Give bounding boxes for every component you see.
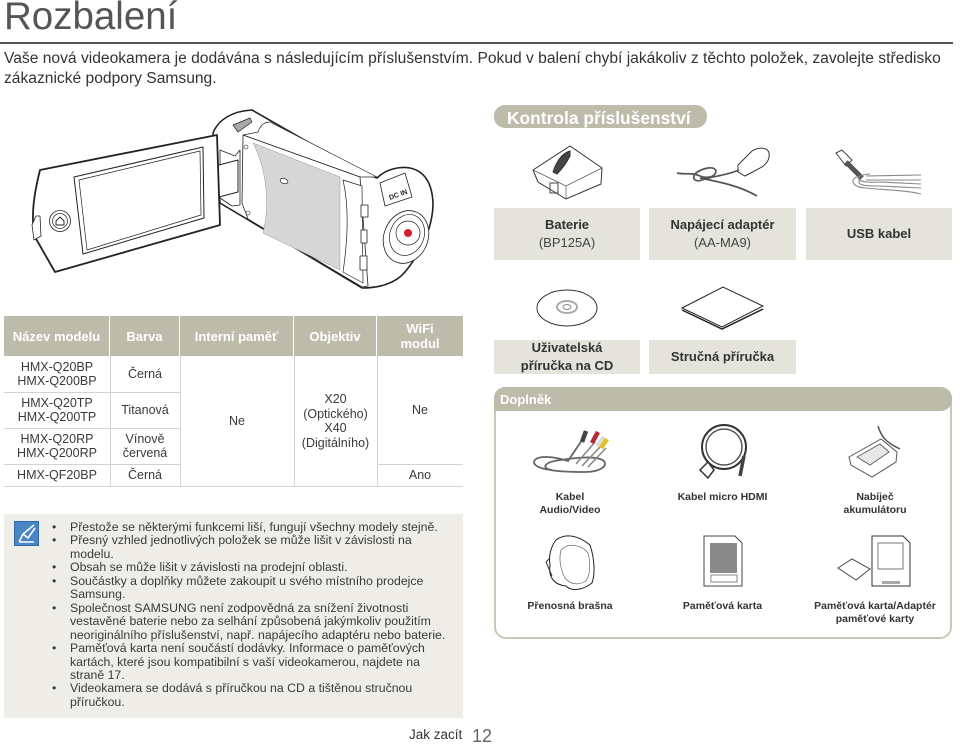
caption: charger: Nabíječ bbox=[856, 490, 894, 502]
cell: Q20BP models: HMX-Q200BP bbox=[17, 374, 97, 388]
notes list: Videokamera se dodává s příručkou na CD a tištěnou stručnou příručkou. bbox=[70, 681, 412, 709]
icon: memory card bbox=[704, 536, 742, 586]
caption: AV cable: Kabel bbox=[556, 490, 584, 502]
table header: model name bbox=[4, 316, 110, 356]
accessory label: USB cable bbox=[806, 208, 952, 260]
cell: Q20TP models: HMX-Q200TP bbox=[18, 410, 96, 424]
cell: Q20BP models bbox=[17, 360, 97, 388]
table header: model name: Název modelu bbox=[13, 328, 100, 344]
notes list: Paměťová karta není součástí dodávky. Informace o paměťových kartách, které jsou kompatibilní s vaší videokamerou, najdete na straně 17. bbox=[70, 641, 425, 682]
caption: AV cable bbox=[539, 490, 601, 516]
panel heading: optional accessories bbox=[494, 387, 952, 411]
accessory label: power adapter: Napájecí adaptér bbox=[670, 217, 775, 232]
table header: colour bbox=[110, 316, 180, 356]
caption: memory card adapter bbox=[814, 600, 936, 625]
caption: charger bbox=[843, 490, 906, 516]
cell: wifi no: Ne bbox=[412, 403, 428, 417]
icon: battery charger bbox=[848, 426, 900, 478]
caption: charger: akumulátoru bbox=[843, 504, 906, 516]
intro text: Vaše nová videokamera je dodávána s následujícím příslušenstvím. Pokud v balení chybí jakákoliv z těchto položek, zavolejte středisko bbox=[4, 50, 941, 67]
cell: titanium: Titanová bbox=[121, 403, 169, 417]
icon: note pencil bbox=[14, 521, 39, 546]
caption: memory card: Paměťová karta bbox=[683, 600, 762, 612]
caption: AV cable: Audio/Video bbox=[539, 504, 601, 516]
notes list: Obsah se může lišit v závislosti na prodejní oblasti. bbox=[70, 560, 348, 574]
cell: black: Černá bbox=[128, 367, 162, 381]
intro text: zákaznické podpory Samsung. bbox=[4, 70, 217, 87]
table header: lens: Objektiv bbox=[309, 328, 361, 344]
cell: Q20RP models: HMX-Q20RP bbox=[21, 432, 93, 446]
table header: lens bbox=[294, 316, 377, 356]
table header: internal memory bbox=[180, 316, 294, 356]
icon: carry case bbox=[545, 535, 594, 590]
icon: micro card with adapter bbox=[837, 536, 910, 586]
accessory label: battery: (BP125A) bbox=[539, 235, 595, 250]
accessory label: power adapter bbox=[649, 208, 796, 260]
cell: black QF: Černá bbox=[128, 468, 162, 482]
cell: wine red: Vínově bbox=[126, 432, 164, 446]
cell: Q20BP models: HMX-Q20BP bbox=[21, 360, 93, 374]
panel: optional accessories bbox=[494, 387, 952, 639]
notes list: Součástky a doplňky můžete zakoupit u svého místního prodejce Samsung. bbox=[70, 574, 423, 601]
cell: wine red: červená bbox=[123, 446, 167, 460]
cell: Q20TP models: HMX-Q20TP bbox=[21, 396, 93, 410]
cell: internal memory no: Ne bbox=[229, 414, 245, 428]
icon: AV cable bbox=[533, 430, 609, 473]
cell: QF20BP model: HMX-QF20BP bbox=[17, 468, 97, 482]
panel: notes bbox=[4, 514, 463, 718]
icon: quick guide booklet bbox=[681, 286, 764, 330]
icon: power adapter bbox=[676, 148, 770, 197]
accessory label: quick guide: Stručná příručka bbox=[671, 349, 774, 364]
title rule bbox=[0, 42, 953, 44]
table header: WiFi: modul bbox=[400, 336, 440, 351]
intro text bbox=[4, 50, 941, 87]
notes list: Přestože se některými funkcemi liší, fungují všechny modely stejně. bbox=[70, 520, 438, 534]
caption: carry case: Přenosná brašna bbox=[527, 600, 613, 612]
icon: micro HDMI cable bbox=[699, 424, 747, 480]
caption: memory card adapter: Paměťová karta/Adaptér bbox=[814, 600, 936, 612]
illustration: camcorder: DC IN bbox=[388, 189, 409, 202]
accessory label: user manual CD bbox=[494, 340, 640, 374]
table: models bbox=[4, 316, 463, 487]
table header: colour: Barva bbox=[126, 328, 163, 344]
cell: zoom values: (Optického) bbox=[303, 406, 368, 420]
cell: Q20TP models bbox=[18, 396, 96, 424]
cell: zoom values: X40 bbox=[324, 421, 347, 435]
notes list: Přesný vzhled jednotlivých položek se může lišit v závislosti na modelu. bbox=[70, 533, 412, 561]
cell: wifi yes: Ano bbox=[409, 468, 431, 482]
caption: memory card adapter: paměťové karty bbox=[836, 613, 914, 625]
accessory label: user manual CD: Uživatelská bbox=[532, 340, 602, 354]
cell: zoom values bbox=[302, 392, 369, 450]
cell: Q20RP models bbox=[17, 432, 97, 460]
notes list: Společnost SAMSUNG není zodpovědná za snížení životnosti vestavěné baterie nebo za selhání způsobená jakýmkoliv použitím neoriginálního příslušenství, např. napájecího adaptéru nebo baterie. bbox=[70, 601, 445, 642]
caption: HDMI cable: Kabel micro HDMI bbox=[678, 490, 767, 502]
notes list bbox=[52, 520, 445, 709]
cell: zoom values: (Digitálního) bbox=[302, 436, 369, 450]
table header: WiFi bbox=[377, 316, 463, 356]
accessory label: USB cable: USB kabel bbox=[847, 226, 911, 241]
icon: CD bbox=[536, 290, 598, 326]
cell: zoom values: X20 bbox=[324, 392, 347, 406]
accessory label: battery: Baterie bbox=[545, 217, 589, 232]
pill heading: accessory check: Kontrola příslušenství bbox=[507, 108, 691, 128]
panel heading: optional accessories: Doplněk bbox=[500, 392, 551, 407]
accessory label: battery bbox=[494, 208, 640, 260]
footer: section name: Jak zacít bbox=[409, 727, 462, 742]
accessory label: quick guide bbox=[649, 340, 796, 374]
table header: internal memory: Interní paměť bbox=[195, 328, 278, 344]
cell: Q20RP models: HMX-Q200RP bbox=[17, 446, 97, 460]
icon: battery bbox=[532, 145, 602, 200]
icon: USB cable bbox=[835, 149, 922, 194]
table header: WiFi: WiFi bbox=[406, 321, 434, 336]
accessory label: power adapter: (AA-MA9) bbox=[694, 235, 751, 250]
cell: wine red bbox=[123, 432, 168, 460]
accessory label: user manual CD: příručka na CD bbox=[521, 358, 613, 373]
